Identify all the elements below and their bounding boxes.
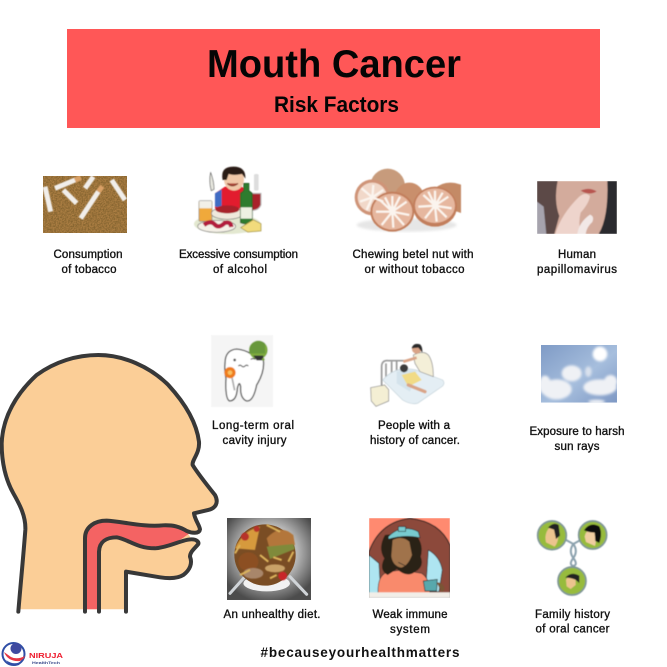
label: betel nut: or without tobacco [364,264,464,276]
label: cancer history: People with a [378,420,451,432]
icon: damaged tooth with lollipop [211,335,273,407]
icon: sun in cloudy sky [539,345,617,404]
label: immune system: system [390,624,430,636]
label: tobacco: of tobacco [62,264,116,276]
icon: betel nuts [355,169,461,232]
logo wordmark: NIRUJA [29,651,64,660]
icon: nurse and patient [371,344,444,406]
icon: woman touching lips [537,181,617,234]
icon: man eating and drinking [194,167,261,234]
label: alcohol: Excessive consumption [179,249,298,261]
label: sun exposure: Exposure to harsh [530,426,624,438]
label: cancer history: history of cancer. [370,435,460,447]
subheading: Risk Factors: Risk Factors [274,92,399,117]
label: oral injury: cavity injury [222,435,287,447]
icon: family DNA tree [538,521,607,595]
label: HPV: papillomavirus [537,264,617,276]
icon: plate of unhealthy food [227,518,311,600]
logo: Niruja HealthTech [2,643,64,666]
label: tobacco: Consumption [54,249,122,261]
tract fill [85,521,189,609]
title banner [67,29,600,128]
heading: Mouth Cancer: Mouth Cancer [207,43,461,86]
label: family history: of oral cancer [536,624,610,636]
label: family history: Family history [535,609,610,621]
icon: head profile with oral tract [2,355,217,612]
label: immune system: Weak immune [372,609,448,621]
label: oral injury: Long-term oral [212,420,294,432]
label: betel nut: Chewing betel nut with [352,249,474,261]
outlines [2,355,217,612]
icon: sick woman with ice pack [369,518,450,598]
hashtag: #becauseyourhealthmatters [260,645,460,660]
label: sun exposure: sun rays [554,441,600,453]
head fill [2,355,217,609]
logo tagline: HealthTech [32,660,61,665]
label: HPV: Human [558,249,596,261]
label: unhealthy diet: An unhealthy diet. [224,609,320,621]
label: alcohol: of alcohol [213,264,267,276]
icon: cigarettes on tobacco [43,176,127,233]
logo mark [2,643,25,666]
